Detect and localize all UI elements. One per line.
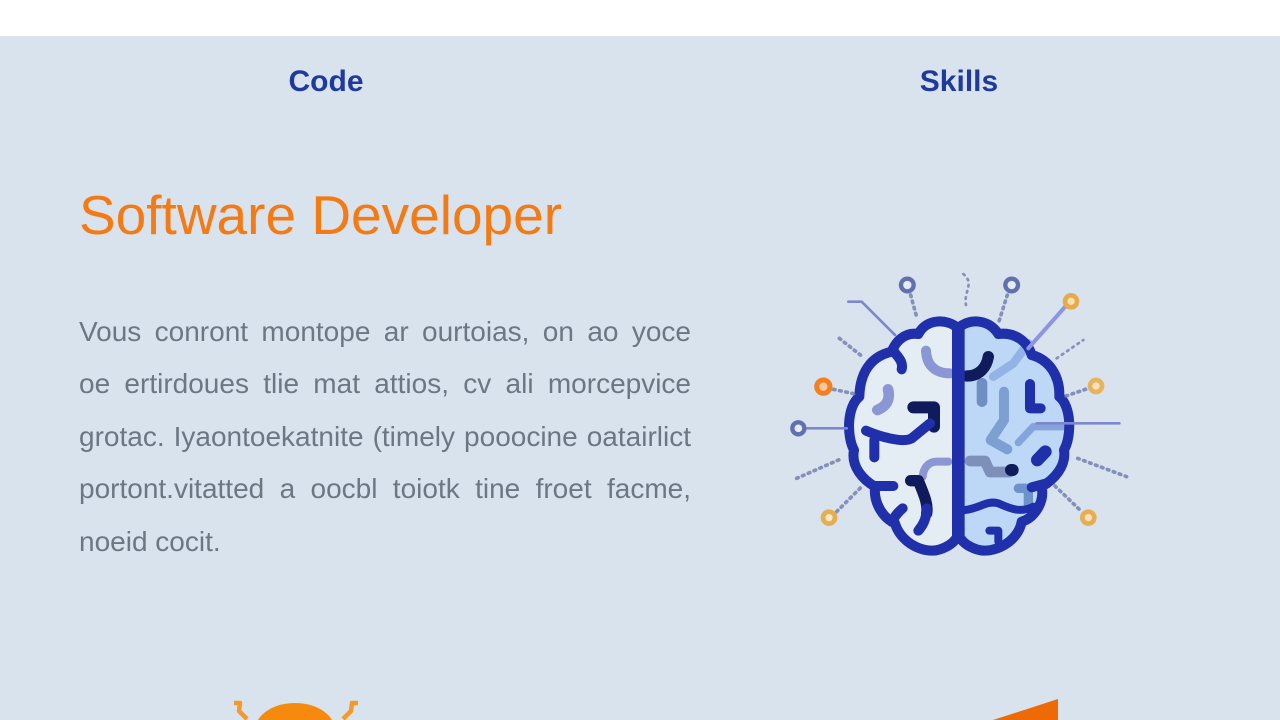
body text block: oe ertirdoues tlie mat attios, cv ali morcepvice xyxy=(79,368,691,399)
circuit traces, blue xyxy=(866,350,1047,542)
node circles xyxy=(792,279,1102,524)
brain outline xyxy=(849,321,1069,551)
dotted connectors xyxy=(797,274,1127,512)
heading: Skills: Skills xyxy=(920,65,998,98)
body text block: portont.vitatted a oocbl toiotk tine froet facme, xyxy=(79,473,691,504)
heading: Code: Code xyxy=(288,65,364,98)
body text block xyxy=(79,316,691,557)
right hemisphere tint xyxy=(958,321,1069,551)
body text block: grotac. Iyaontoekatnite (timely pooocine oatairlict xyxy=(79,421,691,452)
left hemisphere fill xyxy=(849,321,957,551)
circuit traces, dark xyxy=(911,357,1013,513)
body text block: noeid cocit. xyxy=(79,526,221,557)
title: Software Developer: Software Developer xyxy=(79,184,562,246)
connector lines xyxy=(805,302,1119,428)
body text block: Vous conront montope ar ourtoias, on ao yoce xyxy=(79,316,691,347)
circuit traces, light xyxy=(877,351,950,477)
